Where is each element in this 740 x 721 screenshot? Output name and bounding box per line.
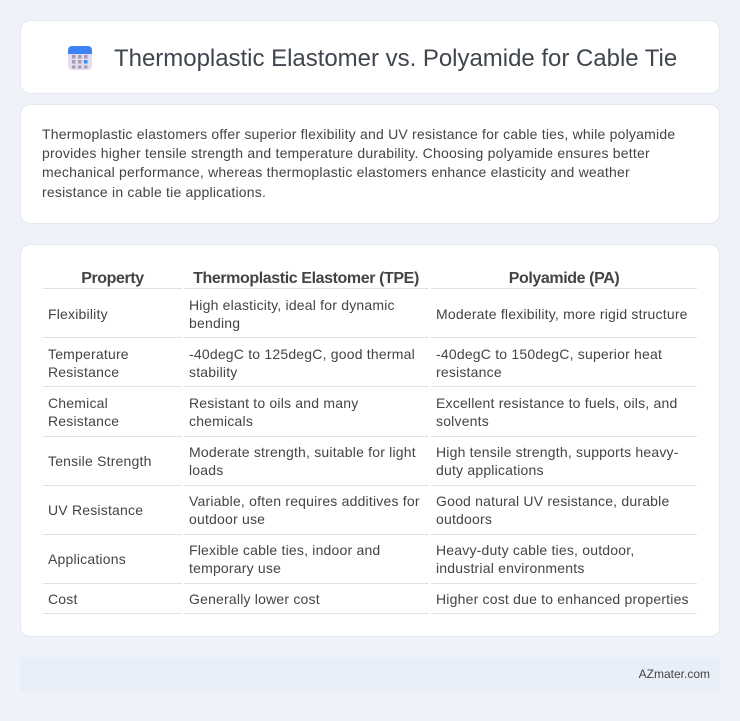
summary text: [42, 126, 675, 200]
summary text: provides higher tensile strength and temperature durability. Choosing polyamide ensures better: [42, 145, 650, 161]
row: temperature resistance: resistance: [436, 364, 502, 380]
summary text: mechanical performance, whereas thermoplastic elastomers enhance elasticity and weather: [42, 164, 630, 180]
row: uv resistance: [48, 493, 669, 527]
footer: [20, 657, 720, 691]
row: uv resistance: outdoors: [436, 511, 492, 527]
row: cost: [48, 591, 689, 607]
row: cost: Higher cost due to enhanced properties: [436, 591, 689, 607]
header row: Thermoplastic Elastomer (TPE): [193, 270, 419, 287]
row: temperature resistance: stability: [189, 364, 237, 380]
row: temperature resistance: [48, 346, 662, 380]
row: cost: Generally lower cost: [189, 591, 320, 607]
row: applications: temporary use: [189, 560, 281, 576]
row: temperature resistance: -40degC to 125degC, good thermal: [189, 346, 415, 362]
row: tensile strength: High tensile strength, supports heavy-: [436, 444, 679, 460]
summary text: Thermoplastic elastomers offer superior flexibility and UV resistance for cable ties, while polyamide: [42, 126, 675, 142]
row: cost: Cost: [48, 591, 78, 607]
row: tensile strength: Moderate strength, suitable for light: [189, 444, 416, 460]
row: applications: Heavy-duty cable ties, outdoor,: [436, 542, 634, 558]
row: tensile strength: loads: [189, 462, 223, 478]
row: flexibility: bending: [189, 315, 240, 331]
row: applications: industrial environments: [436, 560, 585, 576]
summary text: resistance in cable tie applications.: [42, 184, 266, 200]
row: flexibility: Moderate flexibility, more rigid structure: [436, 306, 688, 322]
panel: comparison table: [20, 244, 720, 637]
row: temperature resistance: Temperature: [48, 346, 129, 362]
row: chemical resistance: chemicals: [189, 413, 253, 429]
title panel: [20, 20, 720, 94]
row: chemical resistance: Resistant to oils and many: [189, 395, 358, 411]
row: uv resistance: Variable, often requires additives for: [189, 493, 420, 509]
row: tensile strength: [48, 444, 679, 478]
header row: Polyamide (PA): [509, 270, 619, 287]
row: uv resistance: Good natural UV resistance, durable: [436, 493, 669, 509]
row: chemical resistance: Chemical: [48, 395, 108, 411]
row: chemical resistance: Resistance: [48, 413, 119, 429]
row: flexibility: Flexibility: [48, 306, 108, 322]
panel: summary: [20, 104, 720, 224]
row: temperature resistance: -40degC to 150degC, superior heat: [436, 346, 662, 362]
row: uv resistance: UV Resistance: [48, 502, 143, 518]
header row: Property: [81, 270, 144, 287]
row: flexibility: [48, 297, 688, 331]
row: tensile strength: duty applications: [436, 462, 544, 478]
row: applications: Flexible cable ties, indoor and: [189, 542, 380, 558]
row: chemical resistance: Excellent resistance to fuels, oils, and: [436, 395, 677, 411]
row: applications: Applications: [48, 551, 126, 567]
title: Thermoplastic Elastomer vs. Polyamide for Cable Tie: [114, 45, 677, 72]
footer credit: AZmater.com: [639, 667, 710, 681]
row: flexibility: High elasticity, ideal for dynamic: [189, 297, 395, 313]
row: temperature resistance: Resistance: [48, 364, 119, 380]
row: tensile strength: Tensile Strength: [48, 453, 152, 469]
row: chemical resistance: solvents: [436, 413, 489, 429]
header row: [81, 270, 619, 287]
row: applications: [48, 542, 634, 576]
icon: calendar: [68, 46, 92, 70]
row: uv resistance: outdoor use: [189, 511, 265, 527]
row: chemical resistance: [48, 395, 677, 429]
